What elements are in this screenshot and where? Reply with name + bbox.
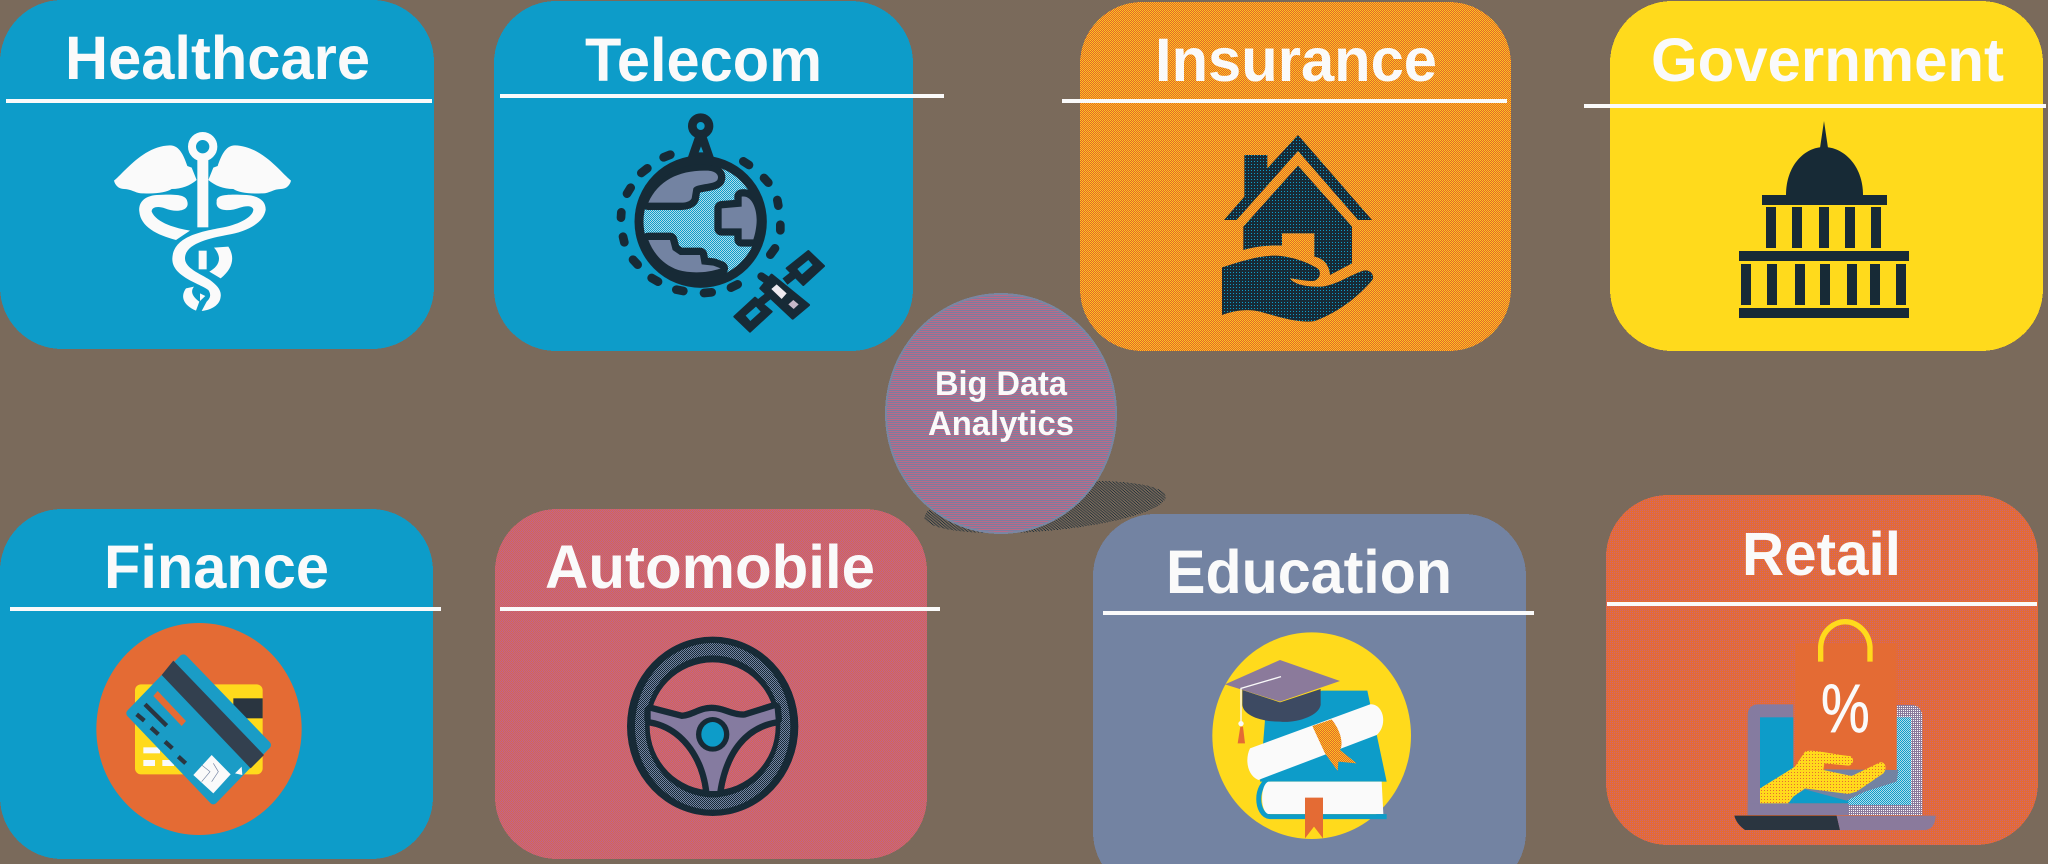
label: Analytics: Analytics — [928, 405, 1074, 443]
icon: caduceus — [114, 136, 291, 311]
shadow under central circle — [922, 473, 1168, 541]
panel: insurance — [1062, 2, 1511, 351]
heading: Finance: Finance — [104, 533, 329, 601]
panel: government — [1584, 1, 2046, 351]
heading: Education: Education — [1166, 538, 1452, 606]
icon: books, diploma and graduation cap — [1212, 632, 1411, 839]
icon text: percent sign: % — [1821, 670, 1870, 747]
panel: automobile — [495, 509, 940, 859]
central circle: Big Data Analytics — [885, 293, 1117, 534]
icon: house in hand — [1222, 135, 1373, 322]
heading: Automobile: Automobile — [545, 533, 875, 601]
panel: finance — [0, 509, 441, 859]
icon: credit cards — [96, 623, 302, 835]
icon: laptop with shopping bag and hand — [1734, 622, 1936, 830]
heading: Government: Government — [1651, 26, 2004, 94]
icon: globe with satellite — [621, 118, 824, 332]
panel: retail — [1606, 495, 2038, 845]
panel: healthcare — [0, 0, 434, 349]
heading: Telecom: Telecom — [585, 26, 822, 94]
heading: Insurance: Insurance — [1155, 26, 1437, 94]
label: Big Data: Big Data — [935, 365, 1068, 403]
icon: steering wheel — [627, 637, 798, 816]
panel: telecom — [494, 1, 944, 351]
icon: capitol building — [1739, 121, 1909, 318]
heading: Healthcare: Healthcare — [65, 24, 370, 92]
panel: education — [1093, 514, 1534, 864]
heading: Retail: Retail — [1742, 520, 1901, 588]
